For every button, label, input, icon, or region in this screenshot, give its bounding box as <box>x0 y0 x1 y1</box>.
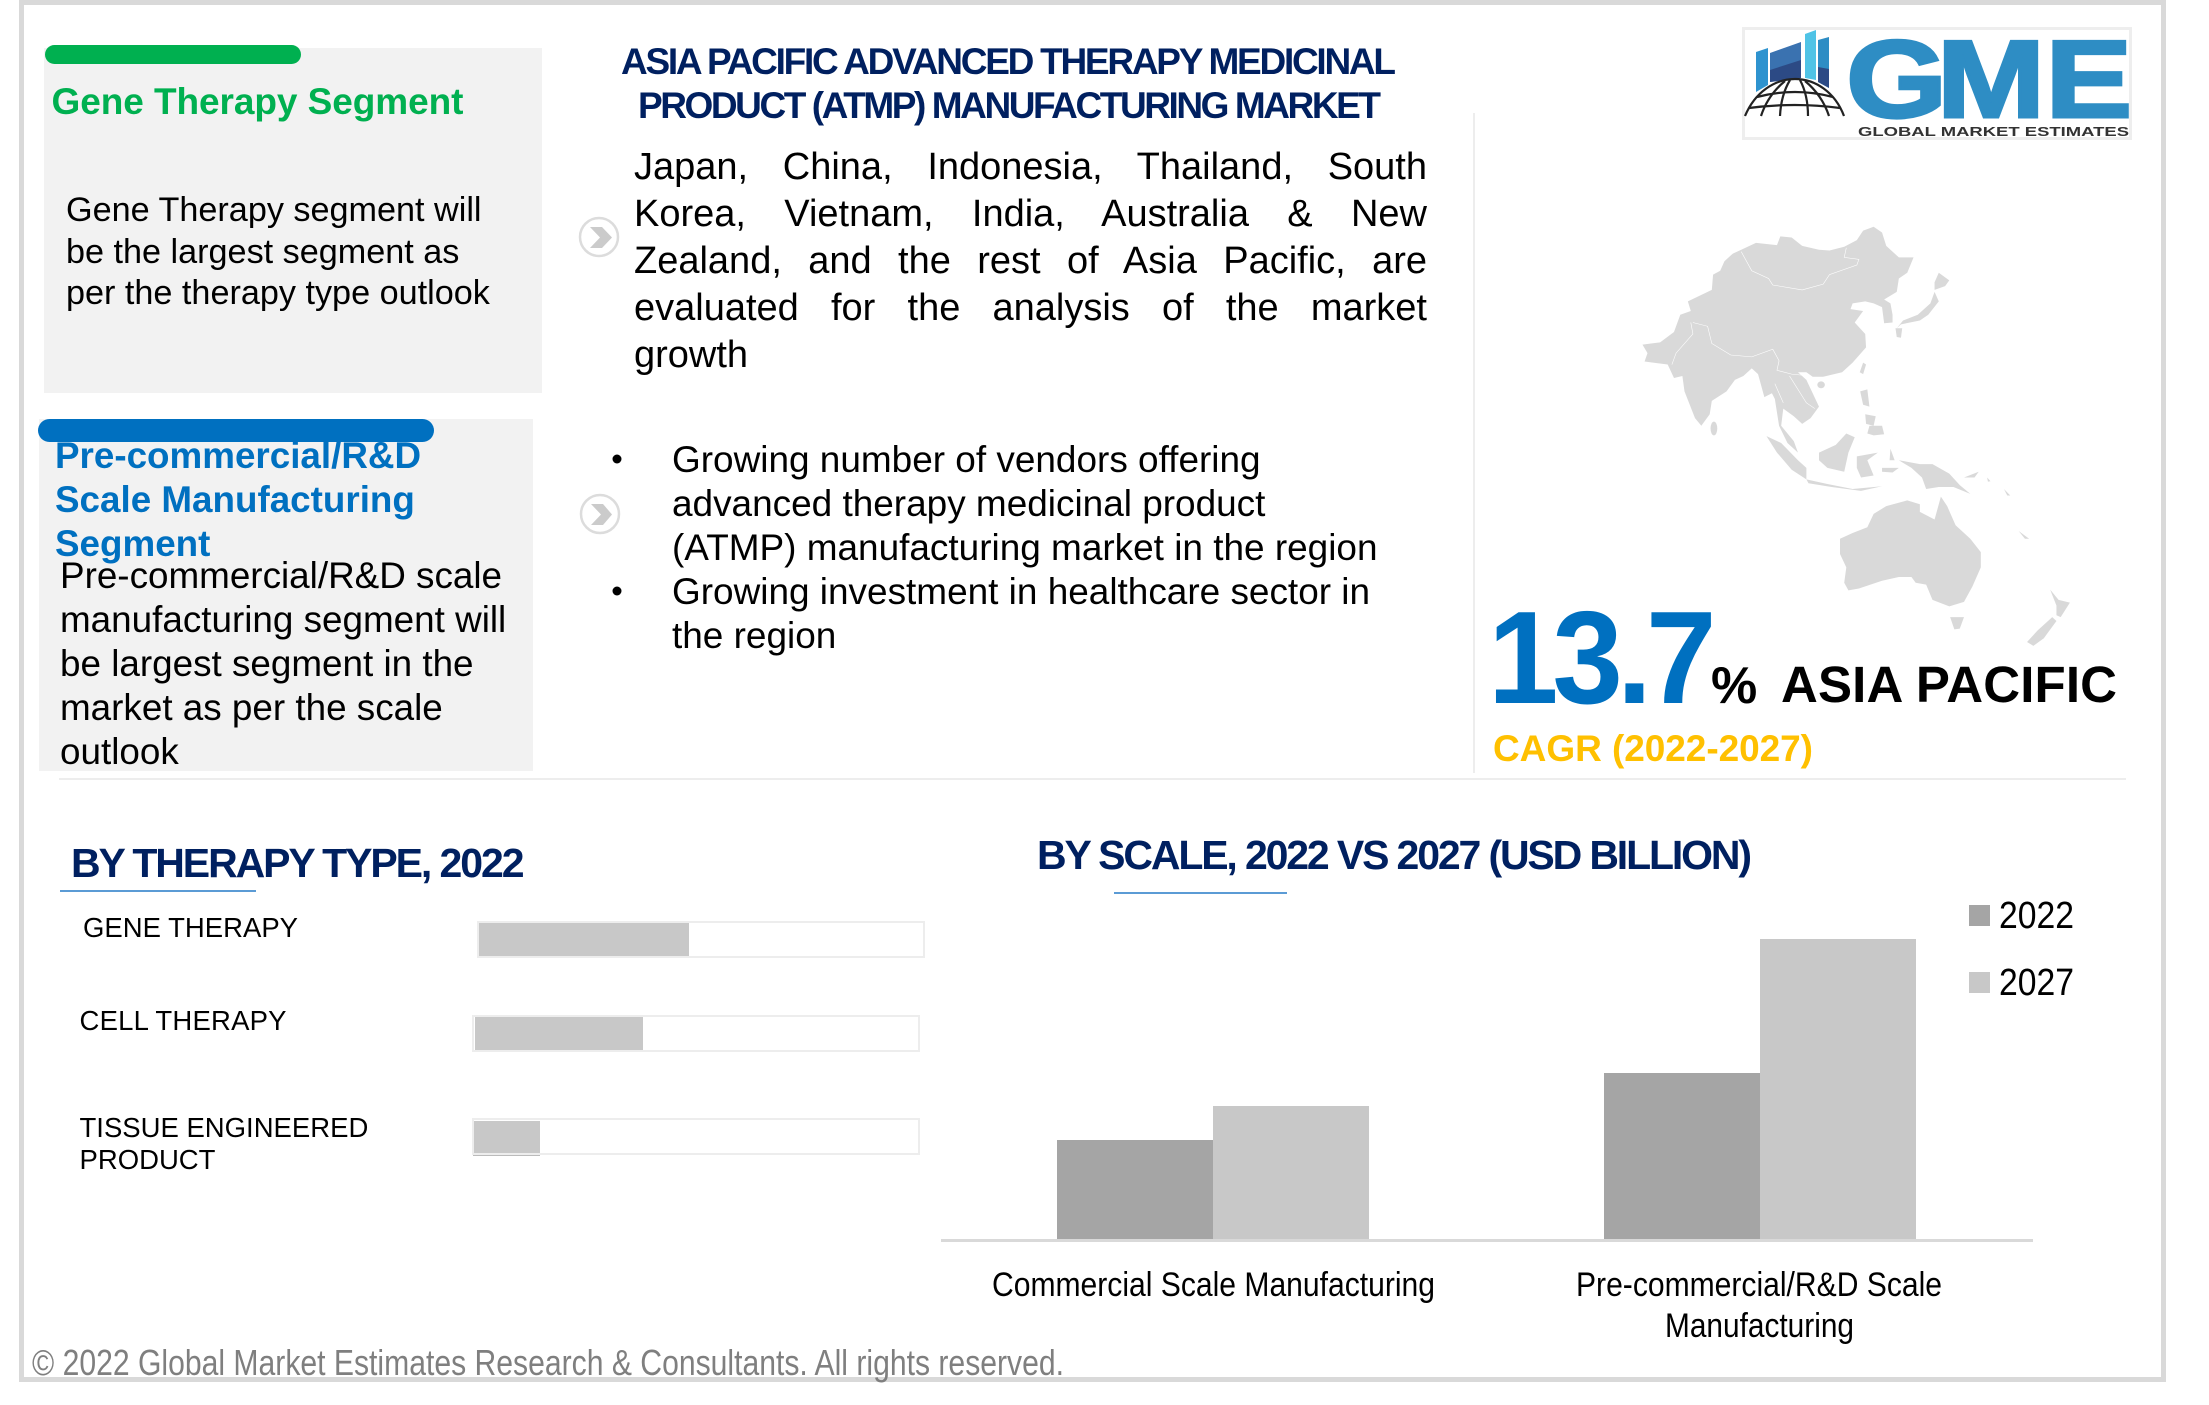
bars: pre-commercial scale <box>1604 939 1916 1239</box>
icon: GME logo: GLOBAL MARKET ESTIMATES <box>1858 124 2129 139</box>
heading: pre-commercial segment: Scale Manufacturing <box>55 479 415 520</box>
heading: pre-commercial segment: Segment <box>55 523 210 564</box>
label: commercial scale manufacturing: Commercial Scale Manufacturing <box>992 1266 1435 1304</box>
text: pre-commercial description: manufacturing segment will <box>60 599 506 640</box>
text: gene therapy description: per the therapy type outlook <box>66 274 491 312</box>
bar: cell therapy <box>473 1016 919 1051</box>
heading: by scale: BY SCALE, 2022 VS 2027 (USD BILLION) <box>1037 832 1752 878</box>
text: countries analysed <box>634 144 1427 384</box>
text: countries analysed: evaluated for the analysis of the market <box>634 286 1427 328</box>
blue header bar <box>38 419 434 442</box>
text: growth drivers bullets: (ATMP) manufacturing market in the region <box>672 527 1378 568</box>
legend: 2022 <box>1999 895 2074 937</box>
footer: copyright: © 2022 Global Market Estimates Research & Consultants. All rights reserved. <box>32 1342 1064 1383</box>
text: gene therapy description: be the largest segment as <box>66 233 459 271</box>
text: countries analysed: Zealand, and the rest of Asia Pacific, are <box>634 240 1427 282</box>
legend: 2027 <box>1999 962 2074 1004</box>
callout: CAGR figure: ASIA PACIFIC <box>1781 656 2117 713</box>
label: pre-commercial scale manufacturing: Manufacturing <box>1665 1307 1854 1345</box>
text: pre-commercial description: outlook <box>60 731 179 772</box>
label: tissue engineered product: TISSUE ENGINEERED <box>80 1112 368 1143</box>
icon: GME logo: M <box>1937 18 2045 141</box>
icon: GME logo: E <box>2046 18 2132 141</box>
panel: gene therapy segment <box>44 45 542 393</box>
text: gene therapy description: Gene Therapy segment will <box>66 191 482 229</box>
text: growth drivers bullets: Growing number of vendors offering <box>672 439 1261 480</box>
text: countries analysed: Korea, Vietnam, India, Australia & New <box>634 192 1427 234</box>
text: growth drivers bullets: the region <box>672 615 836 656</box>
chart: therapy type bars <box>80 912 924 1175</box>
text: growth drivers bullets: advanced therapy medicinal product <box>672 483 1265 524</box>
text: countries analysed: Japan, China, Indonesia, Thailand, South <box>634 146 1427 188</box>
icon: chevron circle 1 <box>580 218 618 256</box>
text: pre-commercial description: be largest segment in the <box>60 643 474 684</box>
icon: chevron circle 2 <box>581 495 619 533</box>
heading: by therapy type: BY THERAPY TYPE, 2022 <box>71 840 524 886</box>
text: pre-commercial description: Pre-commercial/R&D scale <box>60 555 502 596</box>
icon: Asia Pacific map <box>1642 227 2070 646</box>
callout: CAGR figure: % <box>1711 657 1757 715</box>
label: gene therapy: GENE THERAPY <box>83 912 298 943</box>
icon: GME logo <box>1744 18 2132 141</box>
callout: CAGR figure: CAGR (2022-2027) <box>1493 728 1813 769</box>
bar: tissue engineered product <box>473 1119 919 1156</box>
callout: CAGR figure <box>1488 585 2117 769</box>
legend <box>1969 895 2074 1004</box>
label: tissue engineered product: PRODUCT <box>80 1144 216 1175</box>
text: pre-commercial description: market as per the scale <box>60 687 443 728</box>
text: growth drivers bullets <box>612 439 1378 656</box>
callout: CAGR figure: 13.7 <box>1488 585 1712 732</box>
icon: GME logo: G <box>1846 18 1947 141</box>
green header bar <box>45 45 301 64</box>
bar: gene therapy <box>478 922 924 957</box>
text: countries analysed: growth <box>634 334 748 376</box>
bars: commercial scale <box>1057 1106 1369 1239</box>
label: pre-commercial scale manufacturing: Pre-commercial/R&D Scale <box>1576 1266 1942 1304</box>
title: PRODUCT (ATMP) MANUFACTURING MARKET <box>638 85 1381 126</box>
panel: pre-commercial segment <box>38 419 533 772</box>
heading: gene therapy segment: Gene Therapy Segment <box>52 81 464 122</box>
label: cell therapy: CELL THERAPY <box>80 1005 286 1036</box>
heading: pre-commercial segment: Pre-commercial/R&D <box>55 435 421 476</box>
chart: by scale bars <box>941 895 2074 1345</box>
label: pre-commercial scale manufacturing <box>1576 1266 1942 1345</box>
text: growth drivers bullets: Growing investment in healthcare sector in <box>672 571 1370 612</box>
title: ASIA PACIFIC ADVANCED THERAPY MEDICINAL <box>621 41 1396 82</box>
title <box>621 41 1396 126</box>
